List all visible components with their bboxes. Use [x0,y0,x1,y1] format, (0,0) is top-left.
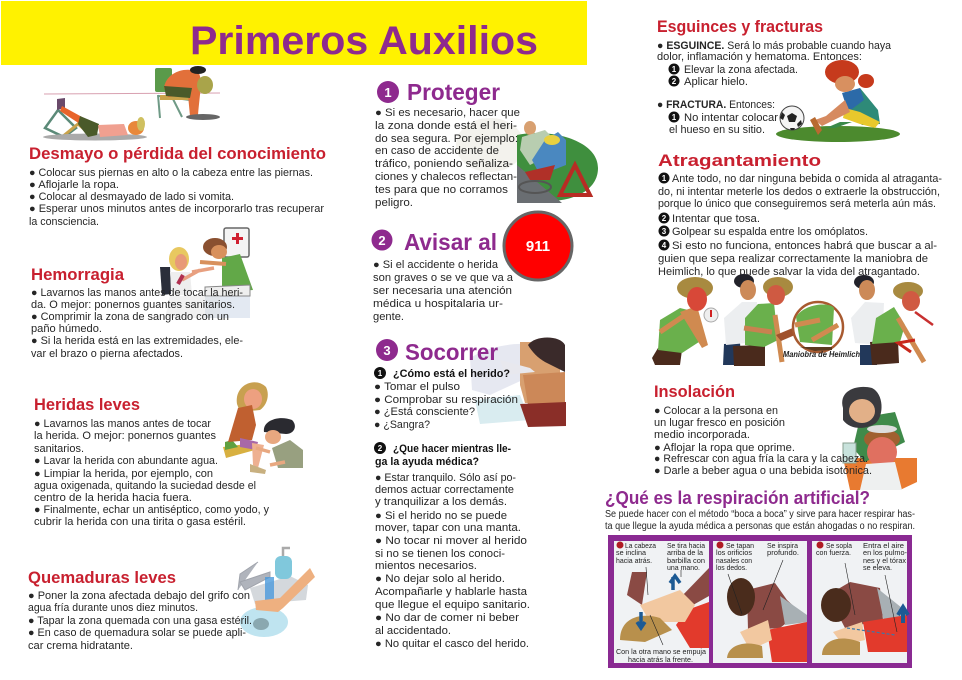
panel: esguinces y fracturas [657,18,900,142]
step 3 panel: en los pulmo- [863,548,908,557]
step 3 panel: se eleva. [863,563,892,572]
number badge [376,339,398,361]
heading: Quemaduras leves [28,569,176,587]
text block: la zona donde está el heri- [375,120,517,132]
step 3 panel: con fuerza. [816,548,851,557]
text block [28,590,252,652]
text block: Si esto no funciona, entonces habrá que buscar a al- [672,240,937,252]
icon: hand under tap [238,548,315,637]
intro text: Se puede hacer con el método “boca a boca” y sirve para hacer respirar has- [605,509,915,520]
intro text: ta que llegue la ayuda médica a personas que están ahogadas o no respiran. [605,521,915,532]
text block: 1 [662,174,667,183]
heading: Desmayo o pérdida del conocimiento [29,145,326,163]
text block: mientras llega la ayuda: y tranquilizar a los demás. [375,496,507,508]
text block: ● ESGUINCE. Será lo más probable cuando haya [657,40,891,52]
text block [31,287,243,360]
text block: mientras llega la ayuda: ga la ayuda médica? [375,456,479,468]
text block: ● Aflojarle la ropa. [29,179,119,191]
heading: Insolación [654,383,735,401]
text block: sanitarios. [34,443,84,455]
icon: first aid scene [160,228,253,318]
text block: medio incorporada. [654,429,750,441]
text block: 1 [672,113,677,122]
text block: en caso de accidente de [375,145,499,157]
text block: ● Lavarnos las manos antes de tocar [34,418,211,430]
text block: ● FRACTURA. Entonces: [657,99,775,111]
text block: mientras llega la ayuda [374,442,530,650]
text block: ● Tapar la zona quemada con una gasa estéril. [28,615,252,627]
text block: ● Si el accidente o herida [373,259,498,271]
text block: como esta el herido: ● Tomar el pulso [374,381,460,393]
text block: mientras llega la ayuda: 2 [378,444,383,453]
title banner [1,1,587,65]
text block [654,405,872,477]
panel: heridas leves [34,382,303,528]
text block: mientras llega la ayuda: ● Estar tranquilo. Sólo así po- [375,472,516,484]
text block: mientras llega la ayuda: demos actuar correctamente [375,484,514,496]
text block: la consciencia. [29,216,99,228]
text block: ● Refrescar con agua fría la cara y la cabeza. [654,453,868,465]
text block: ● Limpiar la herida, por ejemplo, con [34,468,213,480]
step 2 panel: nasales con [716,556,752,565]
step 1 panel: hacia atrás la frente. [628,655,693,664]
text block: gente. [373,311,404,323]
title banner: Primeros Auxilios [190,19,538,63]
emergency number badge: 911 [526,238,550,255]
text block: mientras llega la ayuda: ● No quitar el casco del herido. [375,638,529,650]
text block: son graves o se ve que va a [373,272,513,284]
text block: Elevar la zona afectada. [684,64,798,76]
text block: mientras llega la ayuda: ● No dejar solo al herido. [375,573,505,585]
panel: quemaduras leves [28,548,315,652]
text block: mientras llega la ayuda: si no se tienen los conoci- [375,548,505,560]
icon: heatstroke care [842,387,917,490]
text block: ● Lavar la herida con abundante agua. [34,455,218,467]
icon: choking person [652,277,718,365]
step 3 panel: Se sopla [826,541,852,550]
text block: ● Colocar a la persona en [654,405,778,417]
heading: Esguinces y fracturas [657,18,823,36]
text block: ● Si la herida está en las extremidades, ele- [31,335,243,347]
text block: agua oxigenada, quitando la suciedad desde el [34,480,256,492]
panel: atragantamiento [652,152,942,366]
step 2 panel: Se tapan [726,541,754,550]
text block: da. O mejor: ponernos guantes sanitarios. [31,299,235,311]
number badge [372,230,392,250]
text block: ● Darle a beber agua o una bebida isotónica. [654,465,872,477]
heading: Hemorragia [31,266,125,284]
text block: ● Poner la zona afectada debajo del grifo con [28,590,250,602]
text block: ● Lavarnos las manos antes de tocar la heri- [31,287,243,299]
text block: ● Si es necesario, hacer que [375,107,520,119]
instruction frame [608,535,912,668]
text block: médica u hospitalaria ur- [373,298,503,310]
step 2 panel [713,541,807,663]
text block: tes para que no corramos [375,184,509,196]
emergency number badge [504,212,572,280]
heading: Heridas leves [34,396,140,414]
step 3 panel: Entra el aire [863,541,904,550]
text block: el hueso en su sitio. [669,124,765,136]
text block [373,259,513,323]
text block: ● Finalmente, echar un antiséptico, como yodo, y [34,504,270,516]
text block: como esta el herido [374,367,518,431]
step 1 panel: arriba de la [667,548,703,557]
text block: Intentar que tosa. [672,213,760,225]
text block: 4 [662,241,667,250]
text block: Aplicar hielo. [684,76,748,88]
text block: centro de la herida hacia fuera. [34,492,192,504]
text block: mientras llega la ayuda: ● Si el herido no se puede [375,510,507,522]
intro text [605,509,915,532]
text block: mientras llega la ayuda: ¿Que hacer mientras lle- [393,443,511,455]
step 1 panel: se inclina [616,548,646,557]
text block: ● En caso de quemadura solar se puede apli- [28,627,246,639]
icon: traffic accident [456,118,598,203]
text block: Ante todo, no dar ninguna bebida o comida al atraganta- [672,173,942,185]
number badge: 2 [378,233,386,248]
step 1 panel: La cabeza [625,541,656,550]
heading: Socorrer [405,339,498,365]
panel: desmayo [29,66,326,228]
number badge: 3 [383,343,391,358]
text block: un lugar fresco en posición [654,417,785,429]
icon: rescuer with injured person [470,338,566,427]
text block: paño húmedo. [31,323,102,335]
panel: respiracion artificial [605,487,915,668]
text block: car crema hidratante. [28,640,133,652]
text block: guien que sepa realizar correctamente la maniobra de [658,253,928,265]
panel: insolacion [654,383,917,490]
text block: ● Colocar al desmayado de lado si vomita. [29,191,234,203]
text block: agua fría durante unos diez minutos. [28,602,198,614]
step 1 panel: barbilla con [667,556,705,565]
heading: Avisar al [404,229,497,255]
text block: 1 [672,65,677,74]
text block: mientras llega la ayuda: Acompañarle y hablarle hasta [375,586,527,598]
panel: proteger [375,79,598,209]
step 1 panel: hacia atrás. [616,556,652,565]
text block: do, ni intentar meterle los dedos o extraerle la obstrucción, [658,186,940,198]
icon: children with wound [223,382,303,474]
label: Maniobra de Heimlich [783,349,860,359]
text block [29,167,324,228]
number badge [377,81,399,103]
step 1 panel: Con la otra mano se empuja [616,647,706,656]
text block: mientras llega la ayuda: al accidentado. [375,625,451,637]
panel: socorrer [374,338,566,650]
text block: mientras llega la ayuda: mover, tapar con una manta. [375,522,521,534]
text block: porque lo único que conseguiremos será meterla aún más. [658,198,936,210]
text block [657,40,891,136]
text block: como esta el herido: ¿Cómo está el herido? [393,368,510,380]
heading: ¿Qué es la respiración artificial? [605,487,870,508]
text block: como esta el herido: ● ¿Está consciente? [374,406,475,418]
step 1 panel [614,541,709,664]
step 3 panel: nes y el tórax [863,556,906,565]
text block: tráfico, poniendo señaliza- [375,158,513,170]
panel: hemorragia [31,228,253,360]
step 2 panel: los dedos. [716,563,747,572]
text block: ● Comprimir la zona de sangrado con un [31,311,229,323]
text block [375,107,520,209]
text block: mientras llega la ayuda: ● No dar de comer ni beber [375,612,519,624]
text block: peligro. [375,197,413,209]
text block: mientras llega la ayuda: ● No tocar ni mover al herido [375,535,527,547]
panel: avisar [372,212,572,323]
text block: ciones y chalecos reflectan- [375,171,517,183]
text block: ser necesaria una atención [373,285,512,297]
step 1 panel: una mano. [667,563,700,572]
text block: 3 [662,227,667,236]
step 2 panel: los orificios [716,548,752,557]
text block: como esta el herido: 1 [378,369,383,378]
text block: mientras llega la ayuda: que llegue el equipo sanitario. [375,599,530,611]
icon: footballer with injured ankle [776,60,900,142]
text block: No intentar colocar [684,112,778,124]
step 1 panel: Se tira hacia [667,541,705,550]
text block: la herida. O mejor: ponernos guantes [34,430,217,442]
icon: Heimlich manoeuvre [723,274,843,366]
text block [34,418,270,528]
text block [658,172,942,278]
heading: Atragantamiento [658,152,821,170]
text block: 2 [662,214,667,223]
icon: back blows [851,275,933,365]
text block: 2 [672,77,677,86]
icon: fainting illustrations [43,66,220,140]
text block: ● Esperar unos minutos antes de incorporarlo tras recuperar [29,203,324,215]
text block: Golpear su espalda entre los omóplatos. [672,226,868,238]
step 2 panel: profundo. [767,548,799,557]
text block: cubrir la herida con una tirita o gasa estéril. [34,516,246,528]
number badge: 1 [384,85,392,100]
text block: como esta el herido: ● Comprobar su respiración [374,394,518,406]
text block: dolor, inflamación y hematoma. Entonces: [657,51,862,63]
heading: Proteger [407,79,500,105]
text block: como esta el herido: ● ¿Sangra? [374,419,430,431]
step 2 panel: Se inspira [767,541,798,550]
text block: ● Colocar sus piernas en alto o la cabeza entre las piernas. [29,167,313,179]
text block: var el brazo o pierna afectados. [31,348,183,360]
text block: Heimlich, lo que puede salvar la vida del atragantado. [658,266,920,278]
step 3 panel [812,541,908,663]
text block: ● Aflojar la ropa que oprime. [654,442,795,454]
text block: do sea segura. Por ejemplo: [375,133,518,145]
text block: mientras llega la ayuda: mientos necesarios. [375,560,477,572]
